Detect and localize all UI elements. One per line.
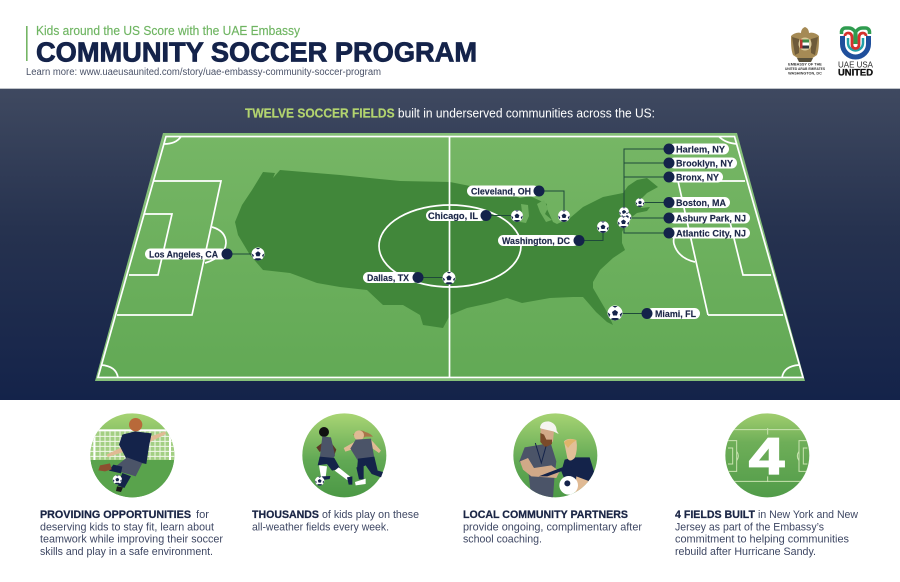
marker: Cleveland: Cleveland, OH [471,186,531,198]
learn more link: Learn more: www.uaeusaunited.com/story/uae-embassy-community-soccer-program [26,67,381,78]
subtitle: Kids around the US Score with the UAE Embassy [36,24,301,38]
panel: providing opportunities [40,411,223,558]
logo: UAE USA United: UAE USA [838,60,873,70]
icon: two kids running [302,413,386,497]
marker: Los Angeles [145,248,264,260]
text: 4 fields built: Jersey as part of the Embassy’s [675,521,824,533]
text: local community partners: provide ongoing, complimentary after [463,521,642,533]
icon: number four on pitch [725,413,810,498]
panel: map band [0,88,900,400]
marker: Washington [498,221,609,247]
marker: Dallas: Dallas, TX [367,273,410,284]
panel: 4 fields built [675,411,858,558]
text: providing opportunities: teamwork while improving their soccer [40,534,223,546]
marker: Los Angeles: Los Angeles, CA [149,250,218,260]
title: COMMUNITY SOCCER PROGRAM [36,36,477,68]
title accent bar [26,26,28,61]
text: thousands: all-weather fields every week. [252,521,389,533]
marker group: north-east cities: Asbury Park, NJ [676,214,746,224]
marker group: north-east cities: Brooklyn, NY [676,158,734,170]
lakes [520,200,552,223]
text: local community partners [463,509,642,546]
marker: Chicago [426,210,523,222]
icon: number four on pitch: 4 [749,429,784,485]
panel: thousands [252,413,419,533]
text: providing opportunities [40,509,223,558]
marker: Cleveland [467,186,570,222]
marker group: north-east cities [618,144,750,240]
text: providing opportunities: PROVIDING OPPORTUNITIES [40,509,191,521]
marker: Washington: Washington, DC [502,236,570,247]
logo: UAE embassy emblem [785,27,825,76]
text: 4 fields built: commitment to helping communities [675,534,849,546]
text: local community partners: LOCAL COMMUNITY PARTNERS [463,509,628,521]
icon: coach and player [513,413,598,498]
marker: Chicago: Chicago, IL [428,211,478,222]
logo: UAE embassy emblem: UNITED ARAB EMIRATES [785,67,825,71]
header [26,24,477,78]
text: thousands: THOUSANDS [252,509,319,521]
logo: UAE USA United [838,28,874,78]
logo: UAE USA United: UNITED [838,68,874,78]
marker: Dallas [363,272,456,284]
icon: kid kicking at goal [90,413,174,498]
marker group: north-east cities: Harlem, NY [676,144,726,156]
marker group: north-east cities: Atlantic City, NJ [676,228,746,240]
text: providing opportunities: for [196,509,209,521]
marker group: north-east cities: Boston, MA [676,198,726,209]
map heading: TWELVE SOCCER FIELDS built in underserved communities across the US: [245,106,655,120]
logo: UAE embassy emblem: WASHINGTON, DC [788,72,822,76]
text: thousands: of kids play on these [322,509,419,521]
US map [235,170,658,328]
text: providing opportunities: skills and play in a safe environment. [40,546,213,558]
text: 4 fields built [675,509,858,558]
text: 4 fields built: 4 FIELDS BUILT [675,509,756,521]
field lines [98,136,803,378]
text: 4 fields built: in New York and New [758,509,858,521]
text: providing opportunities: deserving kids to stay fit, learn about [40,521,214,533]
text: thousands [252,509,419,533]
text: local community partners: school coaching. [463,534,542,546]
logo: UAE embassy emblem: EMBASSY OF THE [788,62,822,66]
marker group: north-east cities: Bronx, NY [676,172,720,184]
text: 4 fields built: rebuild after Hurricane Sandy. [675,546,816,558]
marker: Miami [608,306,700,320]
marker: Miami: Miami, FL [655,309,696,320]
panel: local community partners [463,411,642,546]
soccer field [95,133,805,381]
